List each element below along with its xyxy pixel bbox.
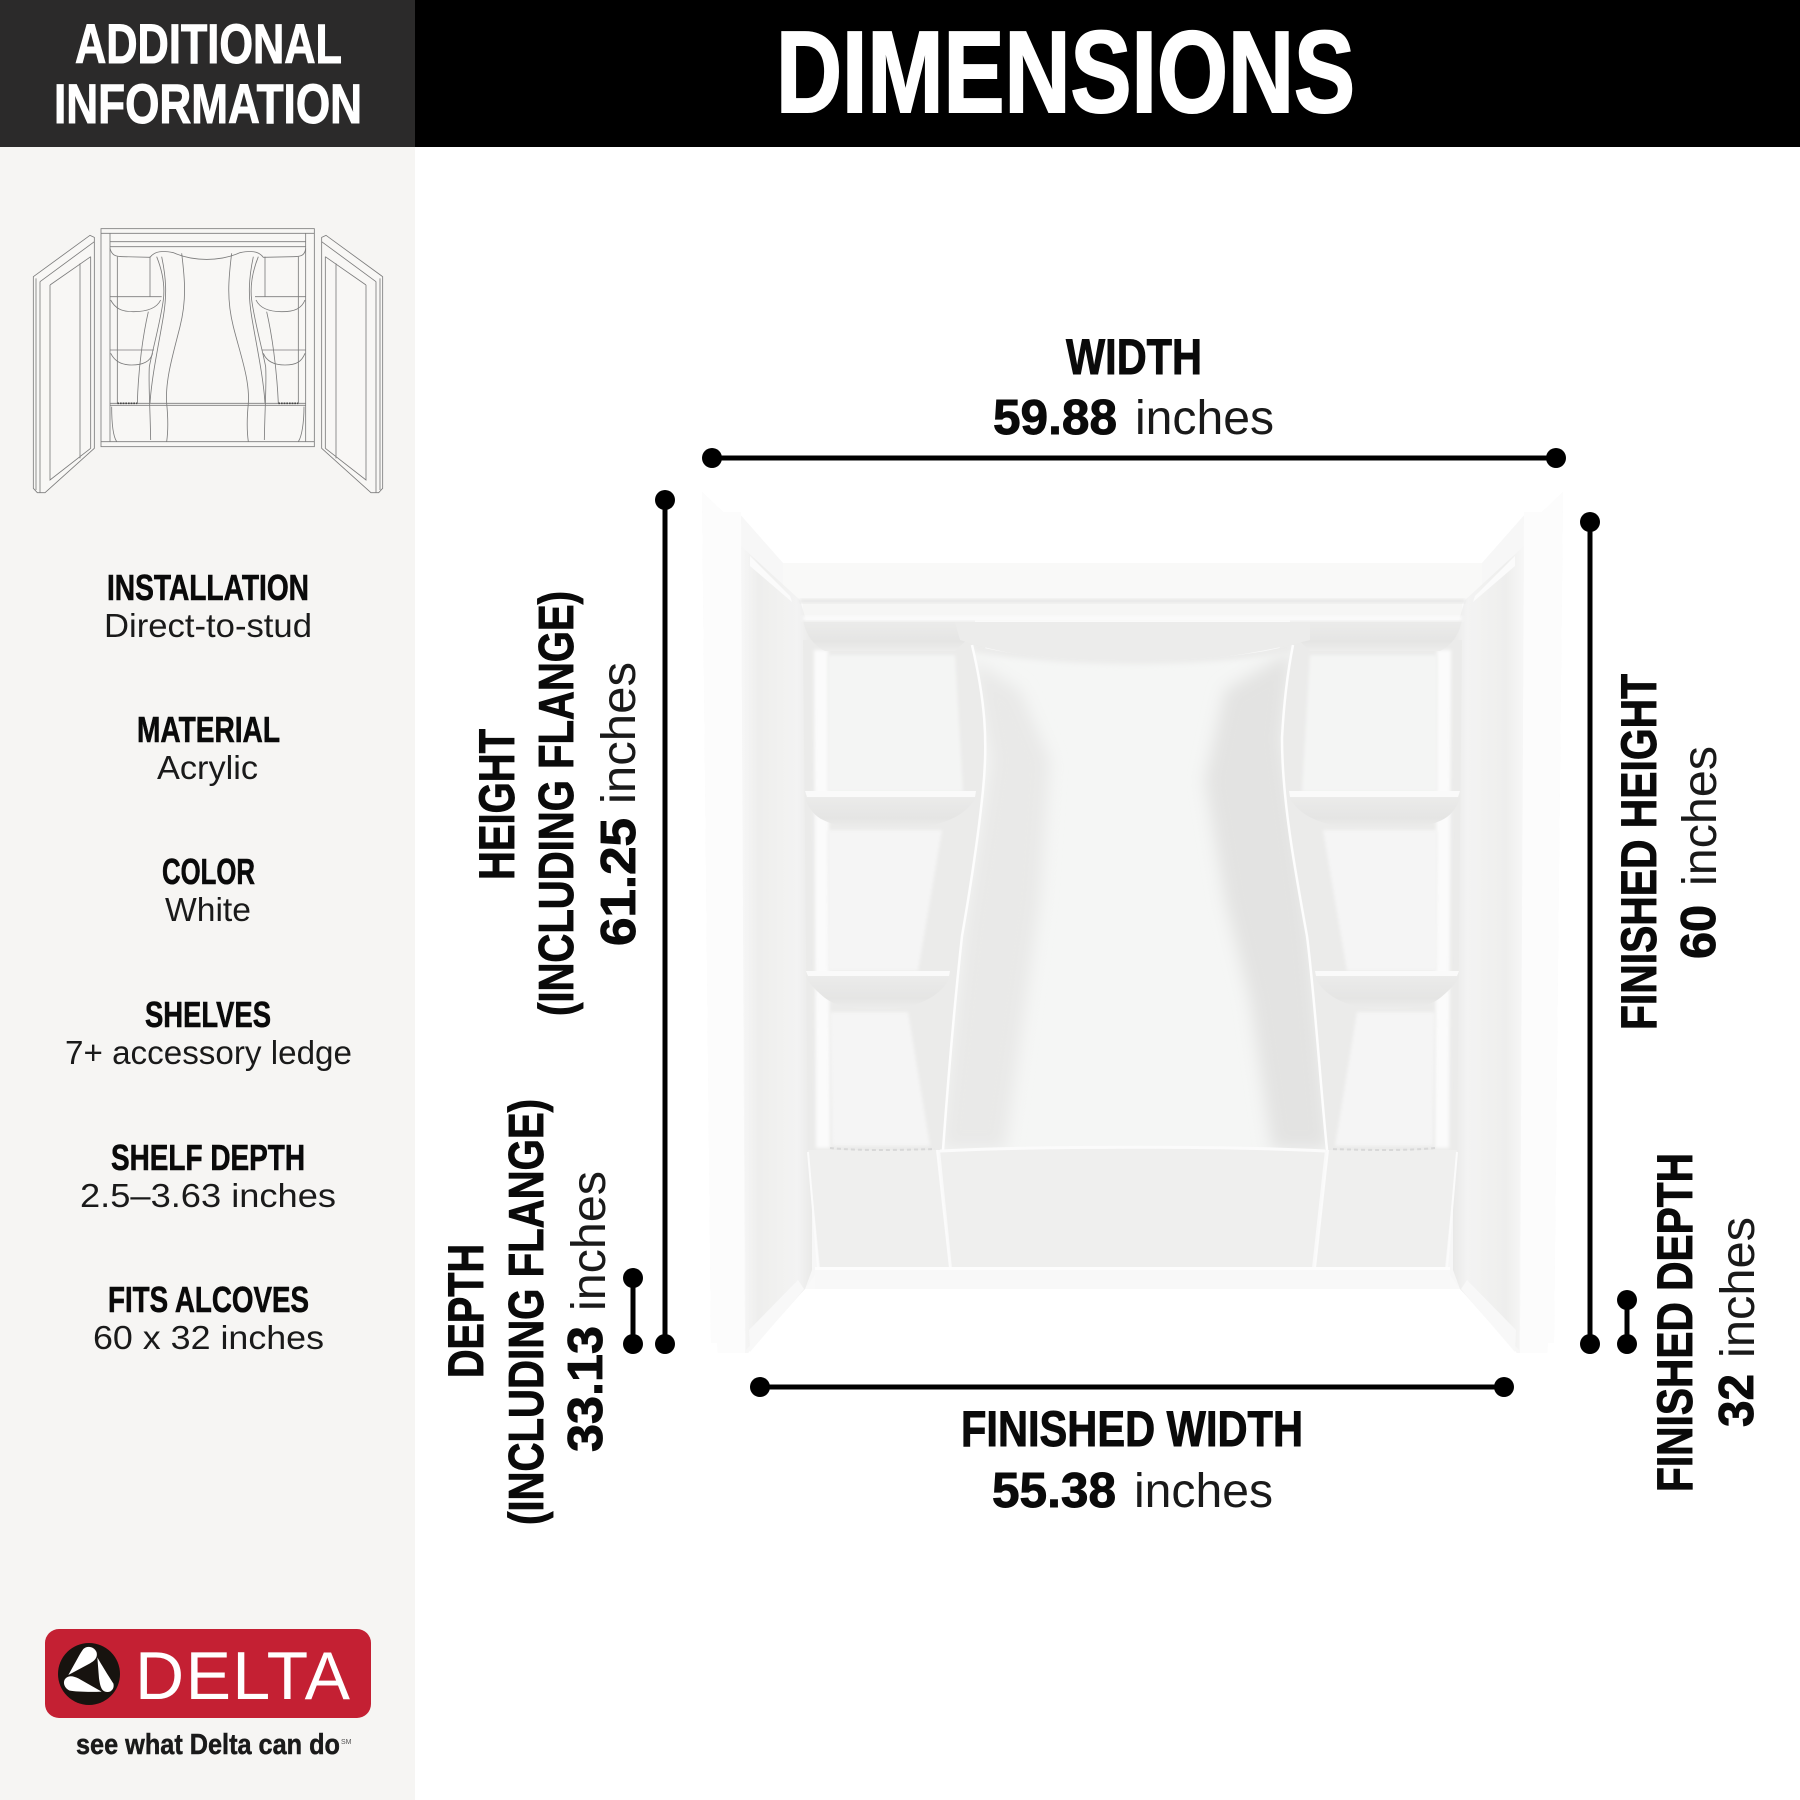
dimension: depth including flange: inches — [563, 1171, 616, 1311]
dimension: depth including flange: 33.13 — [559, 1326, 613, 1452]
header: additional information — [0, 0, 415, 147]
dimension: finished height: FINISHED HEIGHT — [1611, 674, 1667, 1030]
spec: shelves — [65, 994, 352, 1071]
dimension: height including flange: HEIGHT — [469, 729, 525, 880]
dimension: height including flange: inches — [593, 662, 646, 804]
spec: color: White — [165, 891, 251, 928]
logo: delta — [45, 1629, 371, 1761]
dimension: finished depth — [1617, 1153, 1765, 1492]
logo: delta: DELTA — [135, 1638, 351, 1714]
arrow: finished depth line — [1617, 1290, 1637, 1354]
dimension: finished width: 55.38 — [992, 1464, 1116, 1518]
dimension: depth including flange: (INCLUDING FLANGE) — [500, 1099, 554, 1525]
dimension: finished height: 60 — [1672, 905, 1726, 959]
logo: delta: SM — [341, 1739, 352, 1746]
product photo: shower walls — [741, 547, 1524, 1350]
arrow: width line — [702, 448, 1566, 468]
spec: installation: Direct-to-stud — [104, 607, 312, 644]
icon: delta mark — [58, 1643, 120, 1705]
dimension: finished width — [750, 1377, 1514, 1518]
spec: fits alcoves: FITS ALCOVES — [108, 1279, 309, 1320]
arrow: finished width line — [750, 1377, 1514, 1397]
spec: shelf depth — [80, 1137, 336, 1214]
icon: exploded line drawing of shower wall panels — [33, 229, 383, 493]
spec: color — [162, 851, 255, 928]
spec: shelves: 7+ accessory ledge — [65, 1034, 352, 1071]
dimension: finished width: inches — [1134, 1465, 1273, 1518]
dimension: height including flange — [469, 490, 675, 1354]
sidebar background — [0, 0, 415, 1800]
left door — [33, 235, 94, 493]
header bar: dimensions — [415, 0, 1800, 147]
spec: color: COLOR — [162, 851, 255, 892]
dimension: finished height: inches — [1674, 746, 1727, 886]
center panel — [946, 648, 1320, 1149]
spec: material — [137, 709, 280, 786]
dimension: finished height — [1580, 512, 1727, 1354]
top rail — [783, 563, 1482, 600]
dimension: finished depth: FINISHED DEPTH — [1647, 1153, 1703, 1492]
dimension: width: 59.88 — [993, 391, 1117, 445]
arrow: depth line — [623, 1268, 643, 1354]
dimension: width — [702, 329, 1566, 468]
deck — [815, 1146, 1450, 1289]
dimension: height including flange: (INCLUDING FLANGE) — [530, 591, 584, 1016]
spec: material: MATERIAL — [137, 709, 280, 750]
spec: fits alcoves: 60 x 32 inches — [93, 1319, 324, 1356]
arrow: height line — [655, 490, 675, 1354]
spec: material: Acrylic — [157, 749, 258, 786]
dimension: depth including flange: DEPTH — [438, 1244, 494, 1378]
dimension: finished depth: inches — [1712, 1217, 1765, 1358]
arrow: finished height line — [1580, 512, 1600, 1354]
title: dimensions: DIMENSIONS — [776, 7, 1355, 137]
header: additional information: INFORMATION — [54, 72, 362, 135]
header: additional information: ADDITIONAL — [75, 12, 342, 75]
right door — [322, 235, 383, 493]
logo: delta: see what Delta can do — [76, 1729, 340, 1761]
dimension: finished width: FINISHED WIDTH — [961, 1401, 1303, 1457]
center wave band — [955, 622, 1310, 662]
dimension: height including flange: 61.25 — [592, 818, 646, 946]
dimension: width: WIDTH — [1066, 329, 1202, 385]
spec: fits alcoves — [93, 1279, 324, 1356]
spec: installation: INSTALLATION — [107, 567, 309, 608]
spec: shelf depth: 2.5–3.63 inches — [80, 1177, 336, 1214]
dimension: width: inches — [1135, 392, 1274, 445]
spec: shelves: SHELVES — [145, 994, 271, 1035]
dimension: finished depth: 32 — [1710, 1374, 1764, 1427]
spec: installation — [104, 567, 312, 644]
dimension: depth including flange — [438, 1099, 643, 1525]
spec: shelf depth: SHELF DEPTH — [111, 1137, 305, 1178]
center panel edges — [943, 645, 1327, 1150]
